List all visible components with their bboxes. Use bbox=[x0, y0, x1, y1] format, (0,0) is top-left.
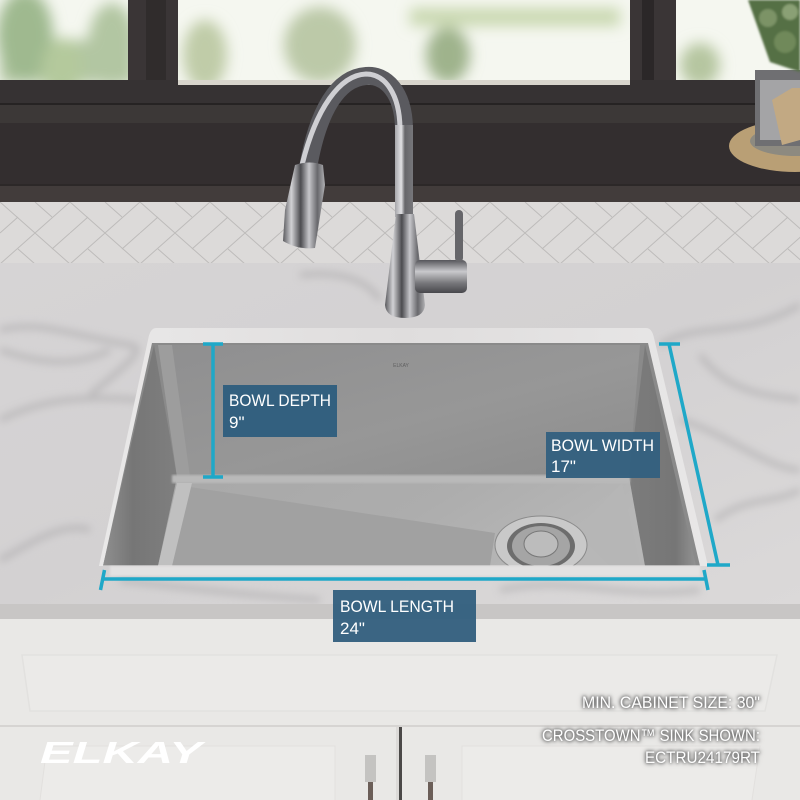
back wall bbox=[163, 345, 640, 477]
length label: BOWL LENGTH bbox=[340, 597, 454, 616]
herringbone backsplash bbox=[0, 202, 800, 264]
model note bbox=[542, 726, 760, 767]
faucet body bbox=[385, 214, 425, 318]
faucet spout bbox=[308, 76, 404, 168]
white cabinet bbox=[0, 619, 800, 800]
cabinet drawer panel bbox=[22, 655, 777, 711]
width label: 17" bbox=[551, 457, 576, 476]
dimension: bowl length bbox=[100, 570, 708, 642]
length label: 24" bbox=[340, 619, 365, 638]
depth label: 9" bbox=[229, 413, 244, 432]
stainless steel sink bbox=[99, 328, 708, 576]
cabinet handle left bbox=[365, 755, 376, 800]
lower rim reflection bbox=[110, 566, 700, 576]
Elkay logo: ELKAY bbox=[40, 735, 207, 770]
dimension: bowl depth bbox=[203, 344, 337, 477]
depth label: BOWL DEPTH bbox=[229, 391, 331, 410]
sink bowl bbox=[103, 343, 700, 574]
cabinet handle right bbox=[425, 755, 436, 800]
window sill bbox=[0, 123, 800, 202]
sink floor bbox=[158, 477, 645, 566]
width arrow bbox=[659, 344, 730, 565]
model note: ECTRU24179RT bbox=[645, 748, 760, 767]
marble countertop bbox=[0, 263, 800, 619]
potted herb on cork coaster bbox=[729, 0, 800, 172]
sink rim bbox=[99, 328, 708, 566]
faucet neck bbox=[395, 125, 413, 217]
width label: BOWL WIDTH bbox=[551, 436, 654, 455]
minimum cabinet size note: MIN. CABINET SIZE: 30" bbox=[582, 693, 760, 712]
dimension: bowl width bbox=[546, 344, 730, 565]
model note: CROSSTOWN™ SINK SHOWN: bbox=[542, 726, 760, 745]
length arrow bbox=[100, 570, 708, 590]
left wall bbox=[103, 345, 177, 566]
left corner bbox=[158, 345, 186, 474]
right wall bbox=[630, 346, 684, 566]
window view bbox=[0, 0, 800, 98]
faucet handle bbox=[415, 260, 467, 293]
depth label bbox=[223, 385, 337, 437]
window frame bbox=[0, 0, 800, 123]
faucet lever bbox=[455, 210, 463, 262]
faucet bbox=[283, 74, 467, 318]
depth arrow bbox=[203, 344, 223, 477]
spray head bbox=[283, 162, 325, 248]
length label bbox=[333, 590, 476, 642]
width label bbox=[546, 432, 660, 478]
drain bbox=[494, 516, 588, 566]
maker mark: ELKAY bbox=[393, 363, 410, 369]
